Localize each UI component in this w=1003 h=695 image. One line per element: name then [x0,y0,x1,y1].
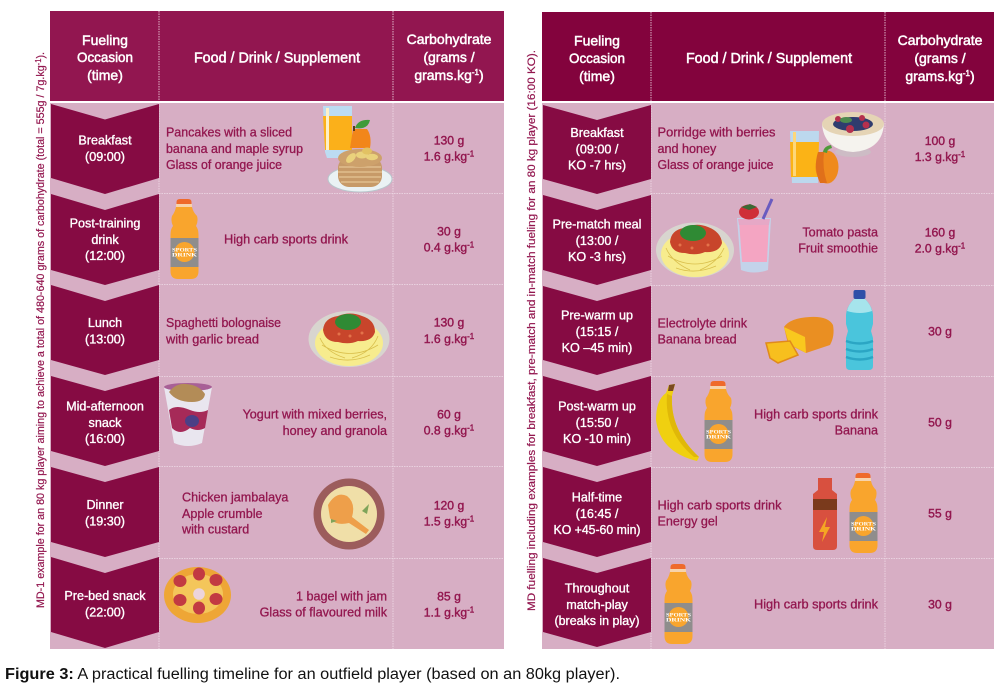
text: snack food [243,408,387,438]
text: lunch food: Spaghetti bolognaise [166,316,281,330]
text: breakfast food [166,126,303,172]
text: dinner food: with custard [181,522,249,536]
carbohydrate values: left: -1 [467,514,475,524]
chevron: Post-warm up [543,376,651,466]
chevron: Throughout match-play: match-play [566,598,628,612]
chevron: Mid-afternoon snack: snack [89,416,122,430]
icon: sports drink bottle: DRINK [851,528,876,532]
text: in-play food: High carb sports drink [754,598,879,612]
icon: sports drink bottle [704,381,732,462]
carbohydrate values: left: 120 g [434,498,464,512]
chevron: Pre-match meal [543,195,651,285]
chevron: Half-time: (16:45 / [576,507,619,521]
carbohydrate values: left: 1.6 g.kg [424,332,467,346]
right table header: Carbohydrate [898,32,983,48]
text: lunch food [165,316,281,346]
vertical caption: MD-1: ). [35,52,47,59]
carbohydrate values: right: 100 g [925,134,955,148]
carbohydrate values: left: 0.8 g.kg [424,424,467,438]
carbohydrate values: left: 1.6 g.kg [424,150,467,164]
vertical caption: MD: MD fuelling including examples for breakfast, pre-match and in-match fueling for an 80 kg player (16:00 KO). [526,50,538,611]
text: breakfast food: and honey [658,142,717,156]
carbohydrate values: left: -1 [467,424,475,432]
right table header: Food / Drink / Supplement [686,51,852,67]
chevron: Throughout match-play [543,558,651,647]
chevron: Pre-match meal: (13:00 / [576,234,619,248]
left table header: Carbohydrate [407,31,492,47]
text: pre-match food: Fruit smoothie [798,242,878,256]
carbohydrate values: left [424,134,475,620]
chevron: Post-training drink: drink [91,233,119,247]
chevron: Pre-match meal: KO -3 hrs) [568,250,626,264]
carbohydrate values: right: -1 [958,150,966,159]
text: half-time food [658,498,782,528]
icon: sports drink bottle: DRINK [706,436,731,440]
text: pre-warm up food: Banana bread [658,332,737,346]
chevron: Post-training drink [51,194,159,285]
icon: banana [656,384,699,461]
chevron: Breakfast: (09:00) [85,150,125,164]
text: post-training food: High carb sports drink [224,232,349,246]
left table header: -1 [472,68,480,77]
icon: yogurt parfait [164,383,212,446]
chevron: Half-time: Half-time [572,490,622,504]
carbohydrate values: right: 55 g [928,506,952,520]
carbohydrate values: left: 60 g [437,408,461,422]
chevron: Pre-warm up: KO –45 min) [562,341,632,355]
chevron: Throughout match-play: Throughout [565,582,630,596]
carbohydrate values: right: 50 g [928,416,952,430]
icon: sports drink bottle: SPORTS [172,248,197,254]
text: pre-bed food [260,590,388,620]
chevron: Pre-bed snack [51,557,159,648]
right table header [542,12,994,101]
text: dinner food: Apple crumble [182,507,263,521]
chevron: Breakfast: Breakfast [570,126,624,140]
text: dinner food: Chicken jambalaya [182,490,288,504]
figure caption: Figure 3: A practical fuelling timeline for an outfield player (based on an 80kg player). [5,666,620,683]
text: half-time food: Energy gel [658,514,718,528]
chevron: Breakfast: (09:00 / [576,142,619,156]
carbohydrate values: right: 30 g [928,598,952,612]
text: dinner food [181,490,288,536]
left table header: (time) [87,67,123,83]
carbohydrate values: left: -1 [467,606,475,614]
text: pre-warm up food: Electrolyte drink [658,316,748,330]
chevron: Lunch: (13:00) [85,332,125,346]
carbohydrate values: right: 2.0 g.kg [915,242,958,256]
icon: sports drink bottle: DRINK [172,254,197,258]
carbohydrate values: left: 30 g [437,224,461,238]
carbohydrate values: left: -1 [467,332,475,341]
chevron: Pre-warm up [543,286,651,375]
text: snack food: Yogurt with mixed berries, [243,408,387,422]
right table header: Fueling [574,32,620,48]
chevron: Post-warm up: (15:50 / [576,416,619,430]
text: pre-bed food: Glass of flavoured milk [260,606,388,620]
text: snack food: honey and granola [283,424,387,438]
left table header: grams.kg [414,67,472,83]
text: post-warm up food [754,408,879,438]
right table header: grams.kg [905,68,963,84]
text: post-warm up food: High carb sports drink [754,408,879,422]
carbohydrate values: left: 1.5 g.kg [424,514,467,528]
chevron: Mid-afternoon snack: (16:00) [85,432,125,446]
icon: energy gel [813,478,837,550]
panel: MD table [526,12,994,649]
text: pre-warm up food [658,316,748,346]
icon: water bottle [846,290,873,370]
icon: sports drink bottle: DRINK [666,618,691,624]
chevron: Breakfast [543,105,651,194]
chevron: Dinner [51,467,159,557]
icon: sports drink bottle: SPORTS [851,522,876,528]
carbohydrate values: left: 85 g [437,590,461,604]
icon: sports drink bottle: SPORTS [666,614,691,618]
icon: sports drink bottle [850,473,878,553]
carbohydrate values: right [915,134,966,612]
chevron: Breakfast: KO -7 hrs) [568,158,626,172]
text: half-time food: High carb sports drink [658,498,782,512]
text: breakfast food: banana and maple syrup [166,142,303,156]
carbohydrate values: right: -1 [958,242,966,250]
chevron: Pre-warm up: (15:15 / [576,325,619,339]
text: pre-match food [798,226,878,256]
text: breakfast food: Glass of orange juice [166,158,282,172]
chevron: Lunch [51,285,159,375]
chevron: Half-time [543,467,651,557]
icon: juice, orange and pancakes [323,106,392,192]
chevron: Pre-bed snack: (22:00) [85,606,125,620]
chevron: Dinner: (19:30) [85,514,125,528]
left table header: (grams / [423,49,475,65]
chevron: Pre-match meal: Pre-match meal [553,218,641,232]
panel: MD-1 table [34,11,504,649]
left table header: Food / Drink / Supplement [194,50,360,66]
vertical caption: MD-1: MD-1 example for an 80 kg player aiming to achieve a total of 480-640 grams of carbohydrate (total = 555g / 7g.kg [35,36,47,608]
chevron: Breakfast [51,104,159,194]
vertical caption: MD-1: -1 [34,58,43,65]
chevron: Dinner: Dinner [86,498,124,512]
carbohydrate values: right: 160 g [925,226,955,240]
icon: chicken jambalaya [314,478,384,550]
icon: spaghetti bolognaise [308,311,390,367]
icon: tomato pasta [656,222,734,278]
icon: sports drink bottle [664,564,692,644]
chevron: Post-warm up: KO -10 min) [563,432,631,446]
icon: porridge bowl, juice and orange [790,112,884,184]
chevron: Post-warm up: Post-warm up [558,400,636,414]
chevron: Half-time: KO +45-60 min) [554,523,640,537]
carbohydrate values: right: 30 g [928,324,952,338]
chevron: Mid-afternoon snack [51,376,159,466]
carbohydrate values: left: 130 g [434,316,464,330]
right table header: Occasion [569,50,625,66]
carbohydrate values: right: 1.3 g.kg [915,150,958,164]
text: breakfast food: Porridge with berries [658,126,776,140]
chevron: Pre-bed snack: Pre-bed snack [64,589,146,603]
icon: banana bread [766,317,834,363]
right table header: (time) [579,68,615,84]
chevron: Pre-warm up: Pre-warm up [561,308,633,322]
right table header: ) [970,68,975,84]
text: pre-bed food: 1 bagel with jam [296,590,387,604]
chevron: Mid-afternoon snack: Mid-afternoon [66,400,144,414]
chevron: Post-training drink: (12:00) [85,249,125,263]
left table header [50,11,504,101]
right table header: -1 [963,69,971,78]
left table header: ) [479,67,484,83]
carbohydrate values: left: 130 g [434,134,464,148]
icon: fruit smoothie [737,199,772,272]
text: pre-match food: Tomato pasta [802,226,878,240]
chevron: Throughout match-play: (breaks in play) [554,614,640,628]
left table header: Occasion [77,49,133,65]
chevron: Lunch: Lunch [88,316,122,330]
text: breakfast food: Pancakes with a sliced [166,126,292,140]
right table header: (grams / [914,50,966,66]
chevron: Post-training drink: Post-training [70,216,140,230]
icon: sports drink bottle [170,199,198,279]
icon: sports drink bottle: SPORTS [706,430,731,436]
carbohydrate values: left: -1 [467,240,475,250]
chevron: Breakfast: Breakfast [78,134,132,148]
left table header: Fueling [82,32,128,48]
text: breakfast food [658,126,776,172]
text: post-warm up food: Banana [835,424,878,438]
carbohydrate values: left: 0.4 g.kg [424,240,467,254]
carbohydrate values: left: -1 [467,150,475,158]
icon: bagel with jam [164,567,231,623]
carbohydrate values: left: 1.1 g.kg [424,606,467,620]
text: lunch food: with garlic bread [165,332,259,346]
text: breakfast food: Glass of orange juice [658,158,774,172]
